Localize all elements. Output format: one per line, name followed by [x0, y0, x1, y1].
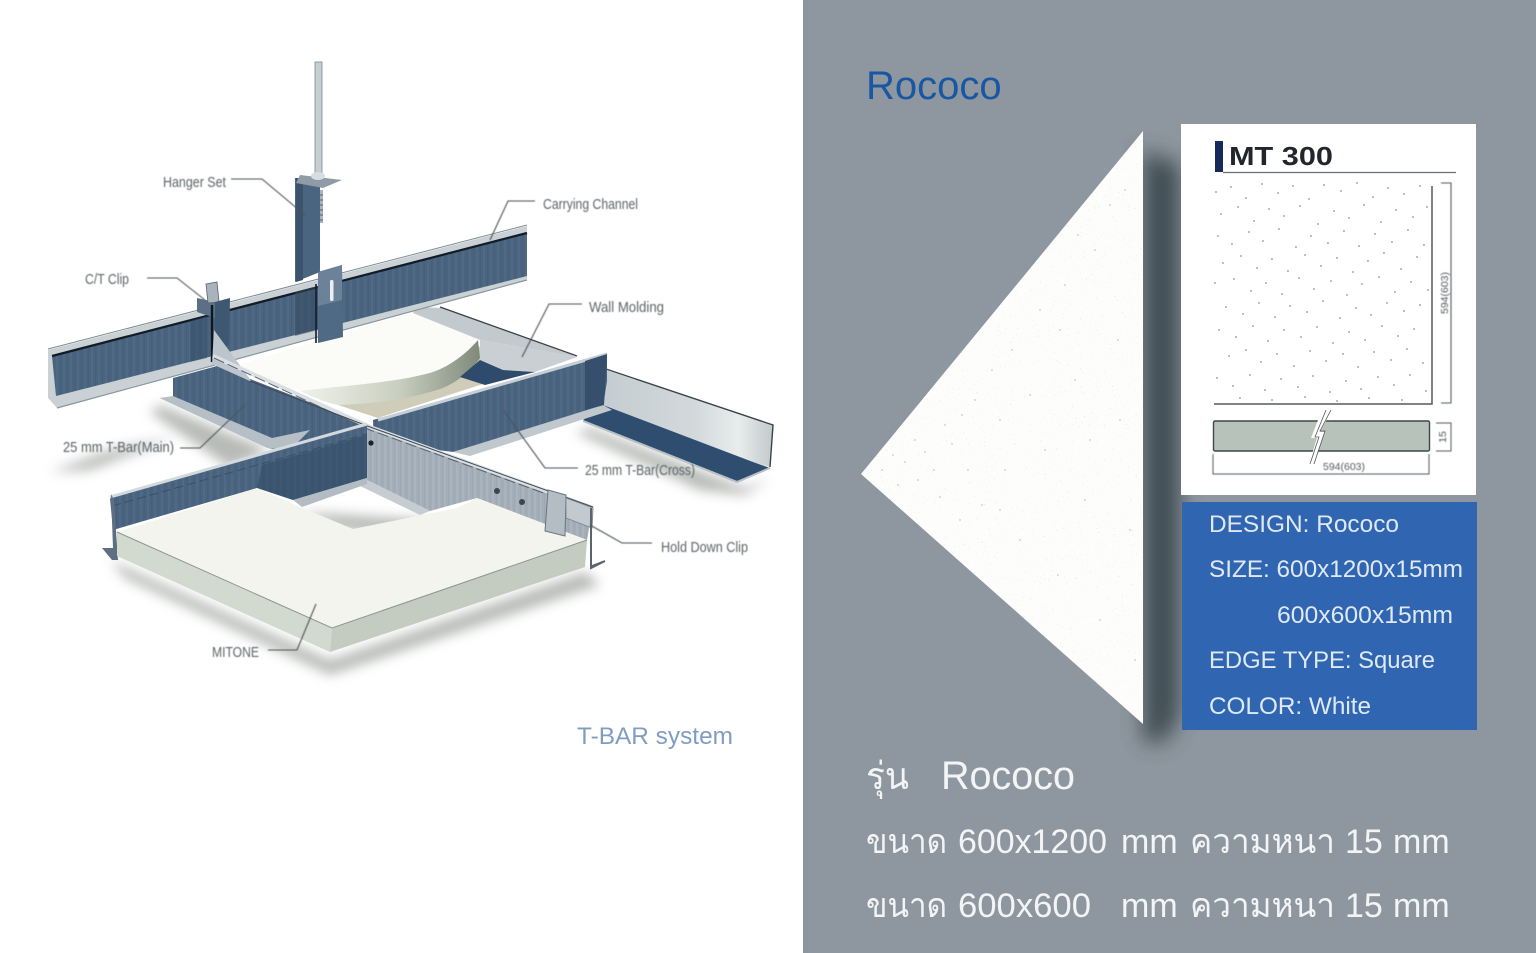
panel: T-BAR system diagram [0, 0, 803, 953]
label: Hold Down Clip: Hold Down Clip [661, 539, 748, 556]
model name: MT 300 [1215, 141, 1456, 172]
width dimension: 594(603) [1323, 461, 1365, 473]
hanger bracket [295, 172, 342, 282]
main T-bar front web [213, 356, 593, 540]
panel: Rococo product sheet [803, 0, 1536, 953]
Thai size line 1: ขนาด [866, 823, 947, 861]
back ceiling tile with curved cut-away [215, 312, 483, 418]
tile sample triangle [861, 131, 1143, 724]
thickness dimension [1436, 423, 1451, 451]
drop shadows [50, 405, 770, 675]
Mitone ceiling tile [117, 488, 587, 652]
label: Carrying Channel: Carrying Channel [543, 196, 638, 213]
speckled tile face [1214, 183, 1432, 404]
model name: MT 300: MT 300 [1229, 141, 1333, 171]
Thai size line 2: mm [1393, 887, 1450, 925]
label: C/T Clip [85, 271, 205, 300]
Thai size line 1: mm [1393, 823, 1450, 861]
back main T-bar web [160, 366, 373, 452]
spec: size alternate: 600x600x15mm [1277, 602, 1453, 629]
height dimension: 594(603) [1439, 272, 1451, 314]
C/T clip [197, 282, 252, 382]
heading: Rococo: Rococo [866, 64, 1002, 108]
spec: size: SIZE: 600x1200x15mm [1209, 556, 1463, 583]
Thai size line 2: 15 [1345, 887, 1383, 925]
width dimension [1213, 454, 1429, 474]
Thai size line 2: 600x600 [958, 887, 1091, 925]
label: Carrying Channel [490, 196, 638, 240]
label: Wall Molding [522, 299, 664, 357]
label: 25 mm T-Bar (Cross) [503, 410, 695, 479]
carrying channel [48, 225, 527, 408]
Thai size line 2: mm [1121, 887, 1178, 925]
Thai size line 1: 15 [1345, 823, 1383, 861]
Thai size line 2: ความหนา [1190, 887, 1335, 925]
Thai size line 1: 600x1200 [958, 823, 1107, 861]
hanger clip plate on channel [316, 265, 343, 343]
height dimension [1439, 183, 1451, 403]
part labels and leader lines [63, 174, 748, 661]
spec: design: DESIGN: Rococo [1209, 511, 1399, 538]
Thai size line 2: ขนาด [866, 887, 947, 925]
Thai model line: รุ่น [866, 756, 909, 799]
label: 25 mm T-Bar (Cross): 25 mm T-Bar(Cross) [585, 462, 695, 479]
label: 25 mm T-Bar (Main): 25 mm T-Bar(Main) [63, 439, 174, 456]
hold down clip [545, 490, 605, 568]
Thai size line 1: ความหนา [1190, 823, 1335, 861]
Thai size line 1: mm [1121, 823, 1178, 861]
Thai model line: Rococo [941, 754, 1075, 798]
Thai size line 2 [866, 887, 1450, 925]
ceiling assembly illustration [48, 62, 773, 675]
label: Hanger Set: Hanger Set [163, 174, 227, 191]
Thai size line 1 [866, 823, 1450, 861]
label: Hold Down Clip [590, 525, 748, 556]
label: MITONE: MITONE [212, 644, 259, 661]
spec: edge type: EDGE TYPE: Square [1209, 647, 1435, 674]
label: C/T Clip: C/T Clip [85, 271, 129, 288]
cross T-bar left [102, 424, 367, 560]
label: Wall Molding: Wall Molding [589, 299, 664, 316]
wall molding [413, 307, 773, 482]
triangle shadow [1143, 150, 1180, 742]
spec: color: COLOR: White [1209, 693, 1371, 720]
label: 25 mm T-Bar (Main) [63, 405, 245, 456]
Thai model line [866, 754, 1075, 799]
label: Hanger Set [163, 174, 305, 215]
thickness dimension: 15 [1437, 431, 1449, 443]
caption: T-BAR system: T-BAR system [577, 723, 733, 750]
panel: MT 300 drawing [1181, 124, 1476, 495]
cross T-bar right [373, 353, 612, 456]
section profile [1214, 410, 1430, 464]
threaded hanger rod [312, 62, 323, 223]
label: MITONE [212, 604, 316, 661]
panel: specifications [1182, 502, 1477, 730]
